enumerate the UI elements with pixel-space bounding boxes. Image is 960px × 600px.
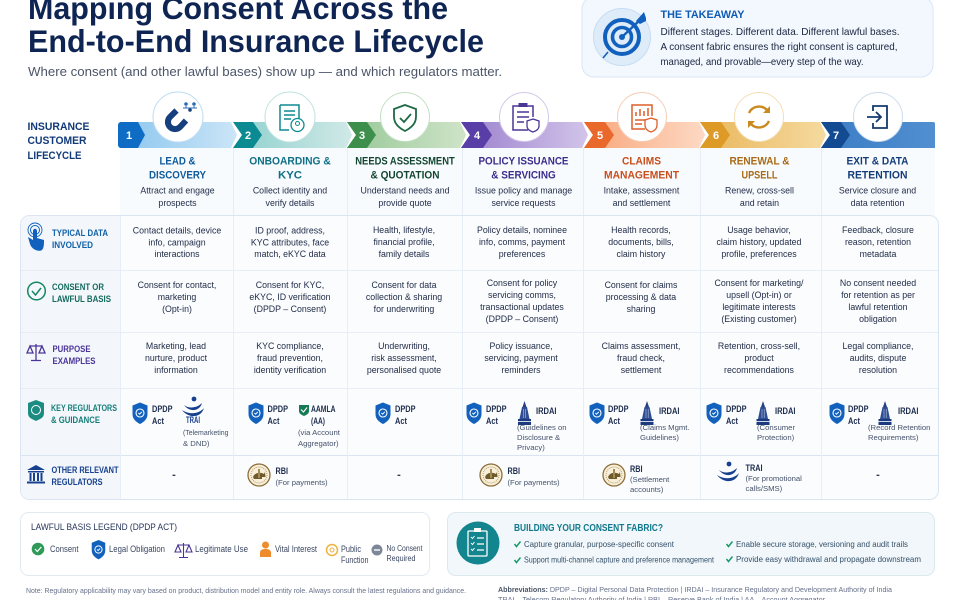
row: consent or lawful basis: eKYC, ID verification	[249, 292, 331, 302]
takeaway text: A consent fabric ensures the right consent is captured,	[660, 42, 898, 53]
legend: legitimate use: Legitimate Use	[195, 544, 248, 554]
row: consent or lawful basis: No consent needed	[840, 278, 916, 288]
row: purpose examples: product	[744, 353, 774, 363]
fabric checklist: Capture granular, purpose-specific consent	[524, 539, 675, 549]
row: key regulators and guidance: DPDP	[848, 404, 869, 414]
stage 1: lead and discovery	[118, 92, 237, 208]
row: key regulators and guidance: Disclosure &	[517, 433, 560, 442]
stage 7: exit and data retention: Service closure and	[839, 186, 916, 196]
row: key regulators and guidance: Act	[152, 416, 164, 426]
icon: exit arrow	[854, 92, 902, 142]
icon: bank	[27, 465, 45, 484]
row: key regulators and guidance: Requirements)	[868, 433, 919, 442]
panel: data table	[20, 216, 938, 500]
abbreviations	[498, 585, 893, 600]
row: key regulators and guidance: DPDP	[486, 404, 507, 414]
lifecycle label: INSURANCE	[28, 121, 90, 133]
row: other relevant regulators: RBI	[508, 466, 520, 476]
row: key regulators and guidance: DPDP	[726, 404, 747, 414]
row: key regulators and guidance: IRDAI	[659, 406, 680, 416]
row: key regulators and guidance: (Consumer	[757, 423, 795, 432]
lifecycle label: CUSTOMER	[28, 135, 87, 147]
icon: check circle	[28, 282, 45, 300]
abbreviations: Abbreviations: DPDP – Digital Personal Data Protection | IRDAI – Insurance Regulatory and Development Authority of India	[498, 585, 893, 594]
row: consent or lawful basis: (DPDP – Consent)	[486, 314, 558, 324]
row: typical data involved: ID proof, address,	[255, 226, 325, 236]
panel: lawful basis legend	[20, 512, 430, 576]
row: key regulators and guidance: Act	[395, 416, 407, 426]
row: purpose examples: KYC compliance,	[256, 341, 324, 351]
row: consent or lawful basis: sharing	[627, 304, 656, 314]
lifecycle label: LIFECYCLE	[28, 150, 82, 162]
row: other relevant regulators: (For payments)	[508, 478, 560, 487]
row: consent or lawful basis: (Existing customer)	[721, 314, 797, 324]
row: consent or lawful basis: collection & sharing	[366, 292, 442, 302]
row: other relevant regulators: -	[876, 469, 880, 481]
stage 7: exit and data retention: 7	[833, 130, 839, 142]
icon: scales	[27, 344, 45, 360]
stage 1: lead and discovery: 1	[126, 130, 132, 142]
stage 4: policy issuance and servicing: & SERVICING	[491, 170, 556, 182]
row: purpose examples: audits, dispute	[850, 353, 906, 363]
row: purpose examples: EXAMPLES	[52, 356, 96, 366]
stage 7: exit and data retention: data retention	[851, 198, 905, 208]
note: Note: Regulatory applicability may vary based on product, distribution model and entity role. Always consult the latest regulations and guidance.	[26, 586, 466, 595]
row: key regulators and guidance: IRDAI	[898, 406, 918, 416]
icon: checklist	[456, 522, 500, 564]
fabric checklist: Support multi-channel capture and preference management	[524, 554, 715, 564]
row: purpose examples: fraud prevention,	[257, 353, 323, 363]
stage 3: needs assessment and quotation: provide quote	[378, 198, 432, 208]
stage 7: exit and data retention: EXIT & DATA	[846, 156, 909, 168]
row: typical data involved	[28, 223, 914, 259]
title	[28, 0, 484, 59]
legend: no consent required: Required	[386, 554, 416, 563]
stage 6: renewal and upsell: UPSELL	[742, 170, 778, 182]
stage 2: onboarding and kyc: 2	[245, 130, 251, 142]
row: typical data involved: family details	[379, 249, 430, 259]
row: other relevant regulators	[27, 462, 880, 494]
row: consent or lawful basis: Consent for contact,	[138, 280, 216, 290]
stage 6: renewal and upsell: RENEWAL &	[730, 156, 790, 168]
row: key regulators and guidance: Act	[848, 416, 860, 426]
row: consent or lawful basis: lawful retention	[848, 302, 908, 312]
takeaway heading: THE TAKEAWAY	[660, 9, 745, 21]
row: purpose examples: fraud check,	[617, 353, 665, 363]
row: consent or lawful basis: servicing comms,	[488, 290, 556, 300]
stage 2: onboarding and kyc: verify details	[266, 198, 315, 208]
stage 5: claims management: CLAIMS	[622, 156, 661, 168]
row: consent or lawful basis: Consent for claims	[605, 280, 678, 290]
legend: consent	[32, 543, 79, 555]
icon: document with person	[265, 92, 315, 142]
row: consent or lawful basis: for underwriting	[374, 304, 434, 314]
stage 2: onboarding and kyc: KYC	[278, 170, 302, 182]
row: consent or lawful basis: upsell (Opt-in) or	[726, 290, 792, 300]
row: typical data involved: preferences	[499, 249, 546, 259]
row: purpose examples: information	[154, 365, 198, 375]
row: key regulators and guidance: Act	[608, 416, 620, 426]
row: key regulators and guidance: (Guidelines on	[517, 423, 567, 432]
panel: stage header cards	[120, 148, 935, 216]
row: purpose examples: risk assessment,	[371, 353, 437, 363]
row: key regulators and guidance: (AA)	[311, 416, 325, 426]
row: consent or lawful basis: Consent for marketing/	[714, 278, 804, 288]
row: key regulators and guidance: Protection)	[757, 433, 795, 442]
takeaway text	[660, 27, 900, 68]
row: purpose examples: Legal compliance,	[843, 341, 913, 351]
stage 7: exit and data retention: RETENTION	[848, 170, 908, 182]
row: other relevant regulators: TRAI	[746, 463, 762, 473]
row: consent or lawful basis: processing & data	[606, 292, 676, 302]
row: typical data involved: KYC attributes, face	[251, 238, 329, 248]
icon: claim chart shield	[618, 92, 666, 142]
row: key regulators and guidance: IRDAI	[536, 406, 556, 416]
stage 4: policy issuance and servicing: service requests	[491, 198, 556, 208]
row: purpose examples	[27, 341, 913, 375]
stage 2: onboarding and kyc	[233, 92, 352, 208]
row: other relevant regulators: calls/SMS)	[746, 484, 783, 493]
row: key regulators and guidance: (Record Retention	[868, 423, 930, 432]
row: consent or lawful basis: legitimate interests	[722, 302, 796, 312]
row: other relevant regulators: REGULATORS	[52, 477, 102, 487]
lifecycle label	[28, 121, 90, 162]
legend title: LAWFUL BASIS LEGEND (DPDP ACT)	[31, 522, 177, 532]
stage 3: needs assessment and quotation	[347, 92, 466, 208]
row: other relevant regulators: -	[397, 469, 401, 481]
stage 4: policy issuance and servicing: POLICY ISSUANCE	[478, 156, 568, 168]
icon: target	[594, 8, 650, 66]
row: purpose examples: identity verification	[254, 365, 326, 375]
row: key regulators and guidance: DPDP	[152, 404, 173, 414]
row: key regulators and guidance: TRAI	[186, 415, 200, 425]
stage 7: exit and data retention	[821, 92, 935, 208]
panel: the takeaway	[582, 0, 933, 77]
legend: no consent required	[372, 544, 423, 563]
legend: public function: Public	[341, 544, 361, 554]
legend: vital interest: Vital Interest	[275, 544, 317, 554]
row: key regulators and guidance: Act	[486, 416, 498, 426]
stage 6: renewal and upsell: Renew, cross-sell	[725, 186, 794, 196]
row: purpose examples: PURPOSE	[52, 344, 90, 354]
stage 6: renewal and upsell	[700, 92, 826, 208]
row: purpose examples: Retention, cross-sell,	[718, 341, 800, 351]
row: consent or lawful basis: CONSENT OR	[52, 282, 104, 292]
icon: teal shield	[28, 400, 44, 421]
legend: vital interest	[260, 542, 317, 557]
row: purpose examples: nurture, product	[145, 353, 208, 363]
fabric checklist: Provide easy withdrawal and propagate downstream	[736, 554, 921, 564]
stage 3: needs assessment and quotation: 3	[359, 130, 365, 142]
row: other relevant regulators: (For payments)	[276, 478, 328, 487]
row: consent or lawful basis: Consent for policy	[487, 278, 558, 288]
row: key regulators and guidance: Privacy)	[517, 443, 545, 452]
row: other relevant regulators: accounts)	[630, 485, 664, 494]
row: key regulators and guidance	[28, 397, 930, 452]
fabric checklist	[514, 539, 921, 564]
row: typical data involved: profile, preferences	[721, 249, 797, 259]
icon: shield check	[380, 92, 430, 142]
stage 4: policy issuance and servicing: Issue policy and manage	[475, 186, 572, 196]
stage 5: claims management: 5	[597, 130, 603, 142]
row: other relevant regulators: OTHER RELEVANT	[52, 465, 119, 475]
row: typical data involved: Health records,	[611, 225, 671, 235]
icon: magnet	[153, 92, 203, 142]
row: consent or lawful basis: LAWFUL BASIS	[52, 294, 111, 304]
stage 6: renewal and upsell: 6	[713, 130, 719, 142]
subtitle: Where consent (and other lawful bases) show up — and which regulators matter.	[28, 64, 502, 79]
row: consent or lawful basis: transactional updates	[480, 302, 564, 312]
icon: clipboard shield	[500, 92, 548, 142]
stage 3: needs assessment and quotation: NEEDS ASSESSMENT	[355, 156, 455, 168]
takeaway text: Different stages. Different data. Different lawful bases.	[660, 27, 900, 38]
row: key regulators and guidance: (Claims Mgmt.	[640, 423, 690, 432]
stage 4: policy issuance and servicing: 4	[474, 130, 481, 142]
fabric heading: BUILDING YOUR CONSENT FABRIC?	[514, 523, 663, 534]
stage 3: needs assessment and quotation: Understand needs and	[360, 186, 450, 196]
row: purpose examples: personalised quote	[367, 365, 441, 375]
stage 1: lead and discovery: Attract and engage	[140, 186, 215, 196]
row: other relevant regulators: (For promotional	[746, 474, 802, 483]
row: typical data involved: TYPICAL DATA	[52, 228, 108, 238]
row: key regulators and guidance: KEY REGULATORS	[51, 403, 117, 413]
row: purpose examples: recommendations	[724, 365, 795, 375]
row: purpose examples: Claims assessment,	[602, 341, 680, 351]
row: consent or lawful basis: obligation	[859, 314, 897, 324]
row: typical data involved: financial profile,	[373, 237, 435, 247]
row: key regulators and guidance: AAMLA	[311, 404, 336, 414]
row: key regulators and guidance: Act	[268, 416, 280, 426]
row: purpose examples: reminders	[501, 365, 541, 375]
row: consent or lawful basis: (DPDP – Consent)	[254, 304, 326, 314]
row: key regulators and guidance: DPDP	[608, 404, 629, 414]
stage 1: lead and discovery: prospects	[158, 198, 197, 208]
row: key regulators and guidance: DPDP	[268, 404, 288, 414]
fabric checklist: Enable secure storage, versioning and audit trails	[736, 539, 908, 549]
row: typical data involved: Health, lifestyle,	[373, 225, 435, 235]
row: key regulators and guidance: Act	[726, 416, 738, 426]
stage 5: claims management: MANAGEMENT	[604, 170, 679, 182]
title: End-to-End Insurance Lifecycle	[28, 23, 484, 59]
row: purpose examples: servicing, payment	[484, 353, 558, 363]
stage 1: lead and discovery: DISCOVERY	[149, 170, 207, 182]
row: key regulators and guidance: & DND)	[183, 439, 210, 448]
legend: legal obligation	[92, 540, 165, 559]
row: other relevant regulators: -	[172, 469, 176, 481]
row: typical data involved: metadata	[860, 249, 896, 259]
row: typical data involved: Feedback, closure	[842, 225, 914, 235]
legend: legal obligation: Legal Obligation	[109, 544, 165, 554]
icon: renew arrows	[734, 92, 784, 142]
row: typical data involved: claim history, updated	[717, 237, 802, 247]
row: typical data involved: Usage behavior,	[727, 225, 791, 235]
legend: public function	[326, 544, 369, 565]
row: purpose examples: resolution	[859, 365, 897, 375]
row: typical data involved: interactions	[154, 249, 200, 259]
stage 5: claims management	[584, 92, 705, 208]
row: purpose examples: settlement	[621, 365, 662, 375]
row: consent or lawful basis: (Opt-in)	[162, 304, 192, 314]
stage 6: renewal and upsell: and retain	[740, 198, 779, 208]
legend: legitimate use	[175, 543, 248, 558]
row: key regulators and guidance: (Telemarketing	[183, 428, 228, 437]
takeaway text: managed, and provable—every step of the way.	[660, 57, 864, 68]
stage 5: claims management: and settlement	[613, 198, 671, 208]
icon: touch hand	[28, 223, 44, 251]
row: typical data involved: info, campaign	[148, 238, 206, 248]
row: typical data involved: reason, retention	[845, 237, 911, 247]
row: purpose examples: Underwriting,	[378, 341, 430, 351]
stage 4: policy issuance and servicing	[461, 92, 588, 208]
row: typical data involved: claim history	[617, 249, 666, 259]
row: key regulators and guidance: Aggregator)	[298, 439, 339, 448]
row: other relevant regulators: (Settlement	[630, 475, 670, 484]
row: typical data involved: INVOLVED	[52, 240, 93, 250]
row: other relevant regulators: RBI	[276, 466, 288, 476]
row: typical data involved: documents, bills,	[608, 237, 674, 247]
stage 5: claims management: Intake, assessment	[604, 186, 680, 196]
panel: building your consent fabric	[448, 512, 934, 576]
row: key regulators and guidance: Guidelines)	[640, 433, 679, 442]
row: typical data involved: Policy details, nominee	[477, 225, 567, 235]
row: typical data involved: info, comms, payment	[479, 237, 566, 247]
row: consent or lawful basis	[28, 278, 916, 324]
row: other relevant regulators: RBI	[630, 464, 642, 474]
row: consent or lawful basis: Consent for data	[371, 280, 437, 290]
row: consent or lawful basis: Consent for KYC,	[256, 280, 324, 290]
row: key regulators and guidance: (via Account	[298, 428, 341, 437]
row: consent or lawful basis: marketing	[158, 292, 196, 302]
row: purpose examples: Policy issuance,	[489, 341, 553, 351]
legend: consent: Consent	[50, 544, 79, 554]
row: typical data involved: Contact details, device	[133, 226, 221, 236]
row: purpose examples: Marketing, lead	[146, 341, 206, 351]
row: key regulators and guidance: DPDP	[395, 404, 416, 414]
legend: no consent required: No Consent	[386, 544, 423, 553]
stage 1: lead and discovery: LEAD &	[160, 156, 196, 168]
legend: public function: Function	[341, 555, 369, 565]
stage 2: onboarding and kyc: Collect identity and	[253, 186, 327, 196]
stage 2: onboarding and kyc: ONBOARDING &	[249, 156, 331, 168]
stage 3: needs assessment and quotation: & QUOTATION	[370, 170, 440, 182]
row: key regulators and guidance: IRDAI	[775, 406, 796, 416]
row: consent or lawful basis: for retention as per	[841, 290, 915, 300]
row: key regulators and guidance: & GUIDANCE	[51, 415, 100, 425]
row: typical data involved: match, eKYC data	[254, 249, 326, 259]
